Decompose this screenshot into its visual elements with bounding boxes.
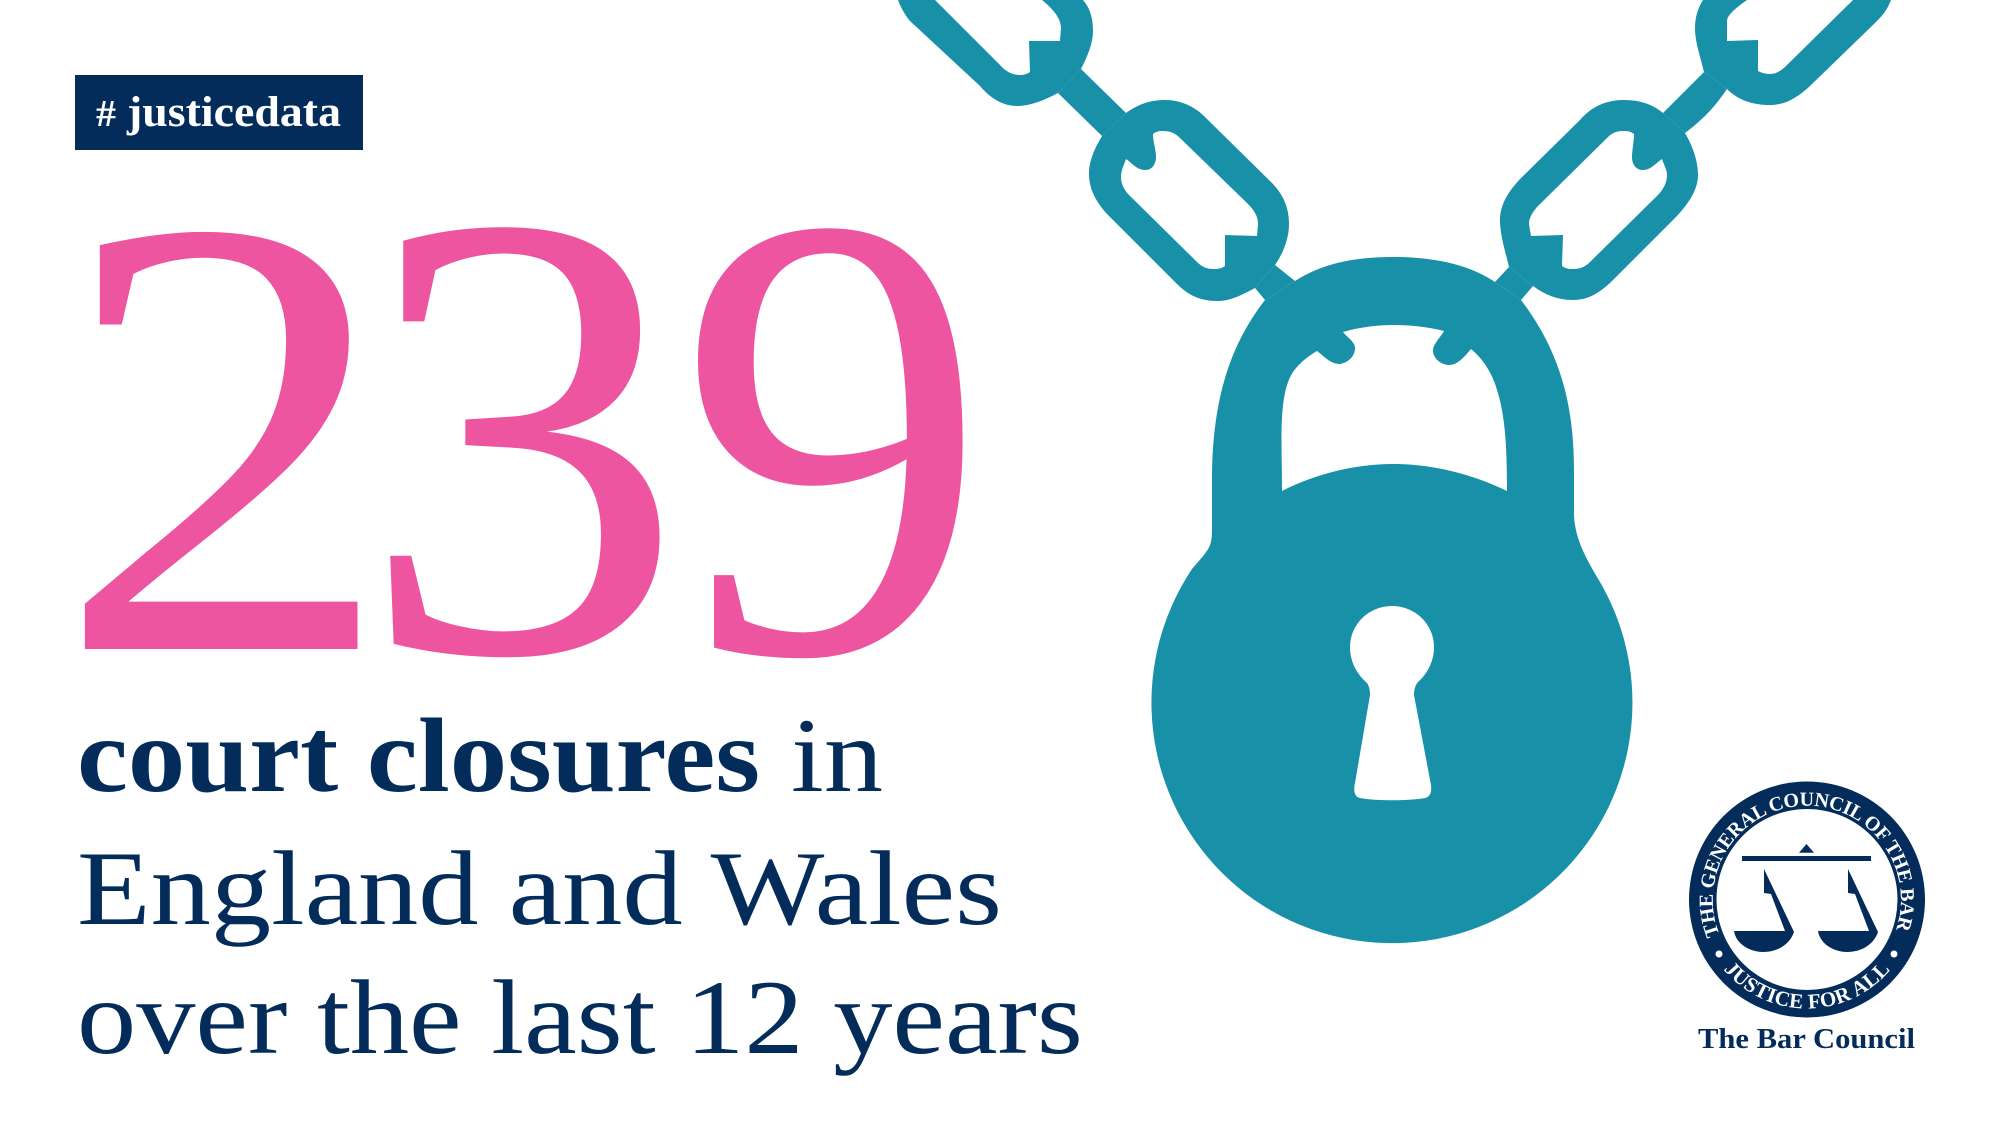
headline text bbox=[77, 697, 1083, 1076]
chain link: lower right bbox=[1500, 100, 1698, 300]
chain link: upper right bbox=[1695, 0, 1891, 105]
headline text: court closures bbox=[77, 697, 760, 814]
hashtag badge: # bbox=[96, 93, 116, 135]
headline text: England and Wales bbox=[77, 830, 1002, 947]
icon: padlock with chain bbox=[898, 0, 1891, 943]
headline text: over the last 12 years bbox=[77, 959, 1083, 1076]
chain link: lower left bbox=[1089, 100, 1289, 301]
hashtag badge bbox=[75, 75, 363, 150]
connectors bbox=[1058, 69, 1126, 136]
big number 239: 2 bbox=[55, 89, 395, 786]
big number 239: 3 bbox=[359, 82, 685, 790]
logo wordmark: The Bar Council bbox=[1698, 1023, 1915, 1055]
padlock body and shackle bbox=[1151, 257, 1632, 943]
chain link: upper left bbox=[898, 0, 1093, 106]
big number 239: 9 bbox=[678, 83, 988, 791]
hashtag badge: justicedata bbox=[126, 89, 341, 136]
seal text top: THE GENERAL COUNCIL OF THE BAR bbox=[1700, 792, 1914, 939]
icon: scales of justice bbox=[1734, 844, 1878, 952]
logo: The Bar Council seal bbox=[1689, 782, 1925, 1018]
headline text: in bbox=[791, 697, 883, 814]
big number 239 bbox=[55, 82, 988, 791]
seal text bottom: JUSTICE FOR ALL bbox=[1724, 962, 1890, 1009]
